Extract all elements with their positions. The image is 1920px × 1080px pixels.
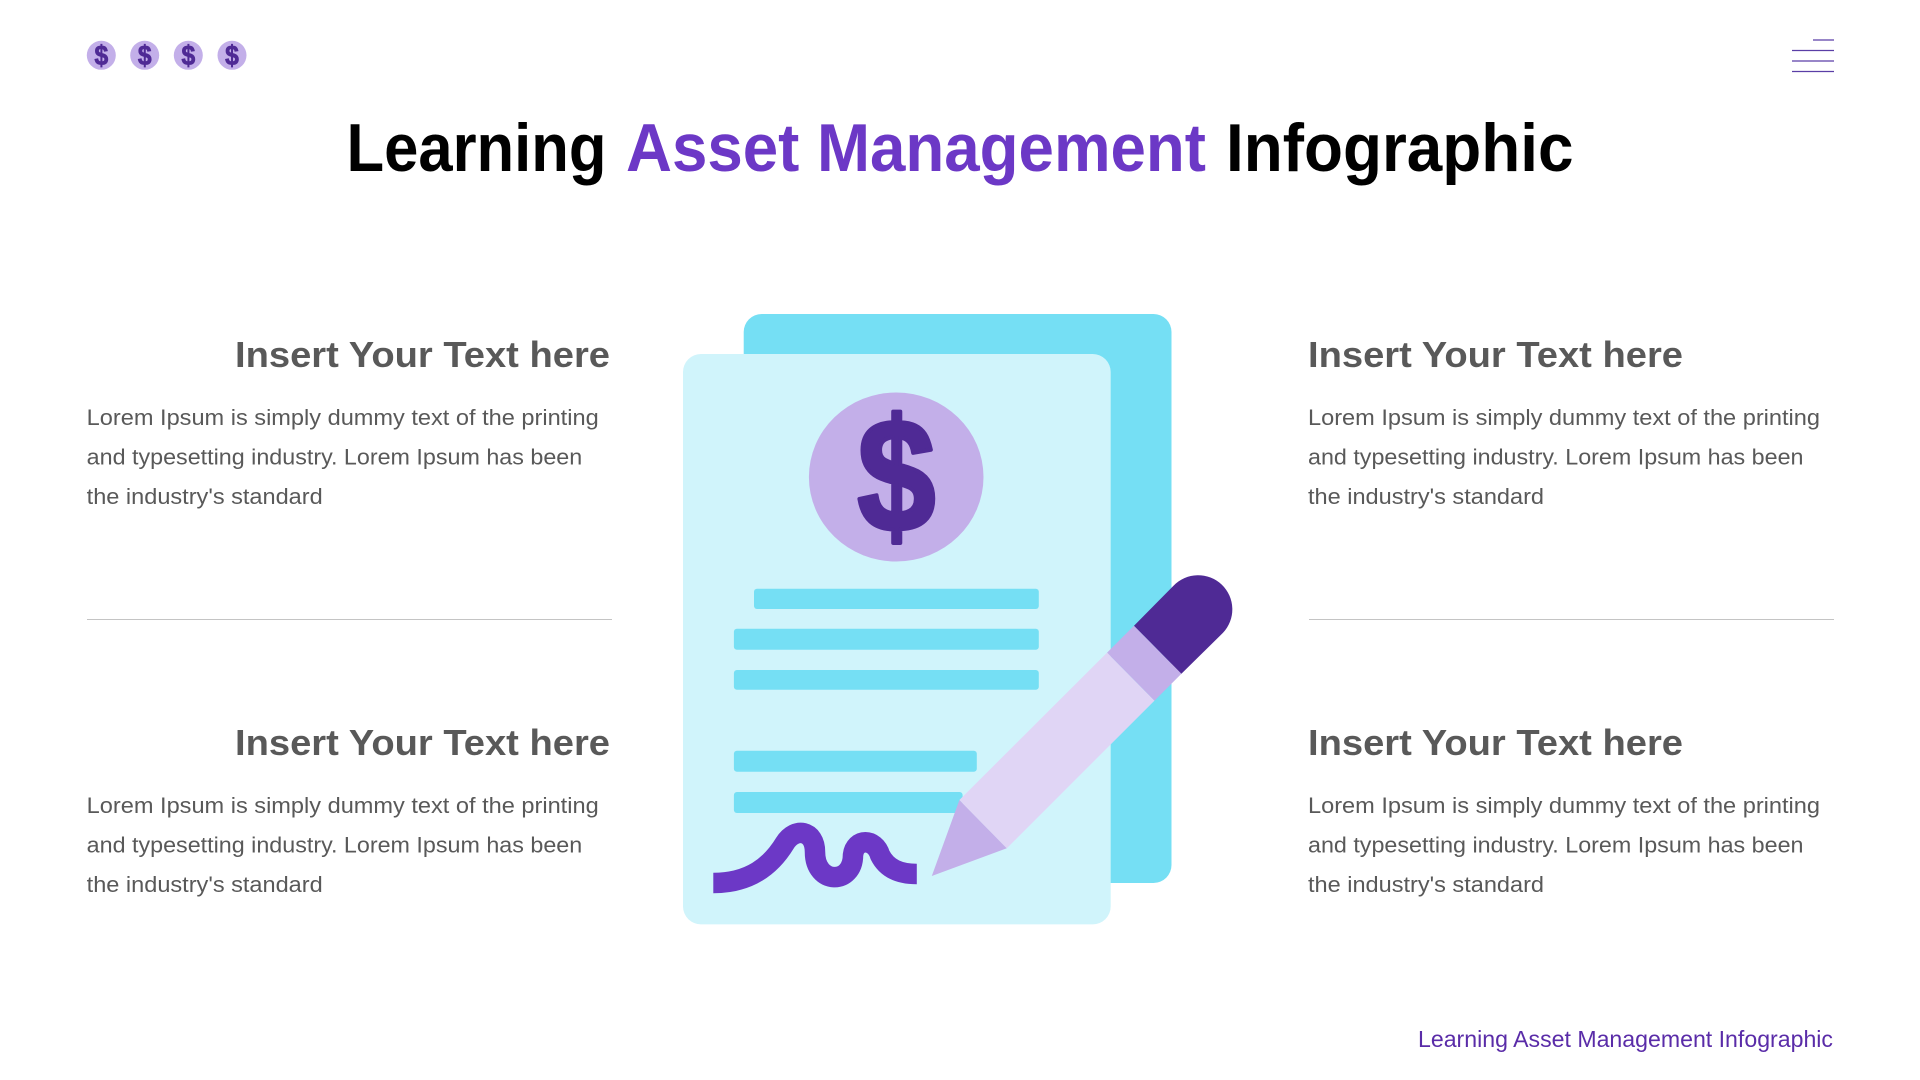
pen body [959,653,1154,848]
panel: bottom right text: Lorem Ipsum is simply dummy text of the printing [1308,793,1820,818]
panel: bottom left text: the industry's standard [87,872,323,897]
panel: top left text: the industry's standard [87,484,323,509]
icon row: dollar coins: $ [225,40,239,71]
panel: top right text [1308,334,1820,509]
icon row: dollar coins [87,40,246,71]
title: Learning [346,110,606,186]
signature [713,833,917,883]
title: Infographic [1226,110,1574,186]
panel: top right text: and typesetting industry. Lorem Ipsum has been [1308,444,1804,470]
icon: large dollar coin: $ [857,385,935,565]
icon row: dollar coins: $ [181,40,195,71]
panel: top left text: Lorem Ipsum is simply dummy text of the printing [87,405,599,430]
pen band [1107,626,1181,701]
panel: top right text: the industry's standard [1308,484,1544,509]
document text lines [734,589,1039,813]
footer text: Learning Asset Management Infographic [1418,1026,1833,1052]
back page [744,314,1172,883]
panel: top left text: and typesetting industry. Lorem Ipsum has been [87,444,582,470]
panel: bottom left text: and typesetting industry. Lorem Ipsum has been [87,832,582,858]
icon: menu lines [1792,40,1834,72]
icon: large dollar coin [809,385,984,565]
panel: bottom right text: and typesetting industry. Lorem Ipsum has been [1308,832,1804,858]
panel: top right text: Lorem Ipsum is simply dummy text of the printing [1308,405,1820,430]
pen tip [932,800,1007,876]
pen [932,575,1232,876]
panel: bottom left text: Lorem Ipsum is simply dummy text of the printing [87,793,599,818]
panel: bottom right text [1308,722,1820,897]
panel: bottom left text: Insert Your Text here [235,722,610,763]
front page [683,354,1111,924]
panel: top left text: Insert Your Text here [235,334,610,375]
icon row: dollar coins: $ [138,40,152,71]
illustration: document with pen [683,314,1232,924]
title: Asset Management [626,110,1206,186]
pen cap [1134,575,1232,674]
panel: top right text: Insert Your Text here [1308,334,1683,375]
title [346,110,1574,186]
panel: bottom left text [87,722,610,897]
panel: bottom right text: the industry's standard [1308,872,1544,897]
icon row: dollar coins: $ [94,40,108,71]
panel: bottom right text: Insert Your Text here [1308,722,1683,763]
panel: top left text [87,334,610,509]
